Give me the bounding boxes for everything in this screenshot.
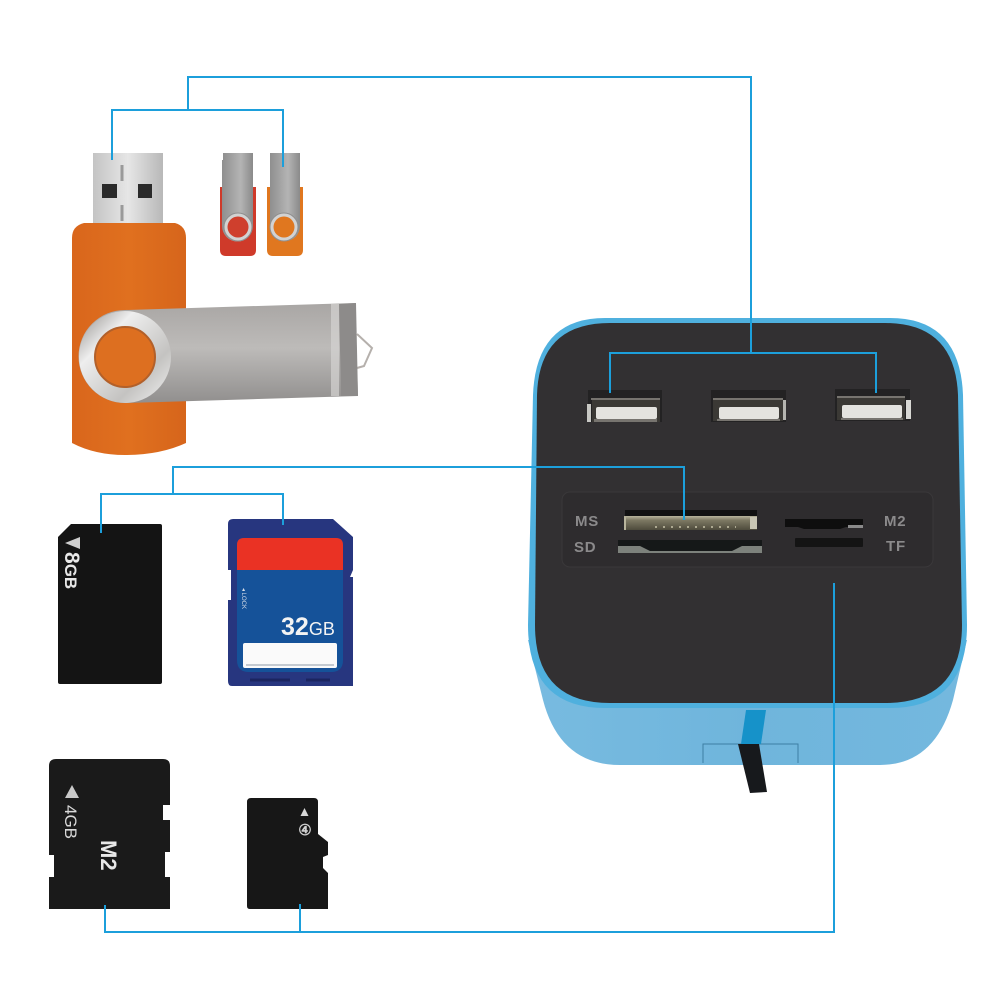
triangle marking — [300, 808, 308, 816]
USB hub card reader — [528, 318, 967, 793]
connector lines: USB drives to USB ports — [112, 77, 876, 393]
blue top rim — [528, 318, 967, 708]
SD card 32GB — [228, 519, 353, 686]
connector lines: MS and SD cards to large slot — [101, 467, 684, 533]
SD slot — [618, 540, 762, 553]
small red flash drive — [220, 153, 256, 256]
M2 marking: M2 — [96, 840, 121, 871]
TF slot — [795, 538, 863, 547]
microSD TF card — [247, 798, 328, 909]
card slot panel — [562, 492, 933, 567]
orange body — [72, 223, 186, 455]
capacity 32GB: 32GB — [281, 613, 335, 641]
USB port 3 — [835, 389, 911, 421]
M2 label: M2 — [884, 513, 906, 530]
lock marking: ◂ LOCK — [240, 588, 246, 609]
large orange USB flash drive — [72, 153, 372, 455]
hub side body — [528, 640, 967, 765]
MS label: MS — [575, 513, 599, 530]
4GB marking: 4GB — [61, 805, 80, 839]
Memory Stick Micro M2 4GB card — [49, 759, 170, 909]
key loop — [357, 334, 372, 368]
USB connector — [93, 153, 163, 224]
M2 slot — [785, 519, 863, 529]
metal swivel — [79, 303, 358, 403]
SD label: SD — [574, 539, 596, 556]
MS slot — [624, 510, 757, 530]
USB port 2 — [711, 390, 786, 422]
small orange flash drive — [267, 153, 303, 256]
red label band — [237, 538, 343, 570]
class 4 marking: ④ — [298, 822, 312, 839]
8GB marking: 8 GB — [60, 552, 83, 589]
connector lines: M2 and TF cards to small slot — [105, 583, 834, 932]
Memory Stick 8GB card — [58, 524, 162, 684]
TF label: TF — [886, 538, 906, 555]
blue cable sleeve — [741, 710, 766, 744]
4GB marking — [61, 785, 80, 839]
USB port 1 — [587, 390, 662, 422]
swivel ring and orange pivot — [79, 311, 171, 403]
bottom contact recesses — [250, 678, 330, 682]
black top face — [535, 323, 962, 703]
white write-on label — [243, 643, 337, 668]
black cable — [738, 744, 767, 793]
cable slot outline — [703, 744, 798, 763]
